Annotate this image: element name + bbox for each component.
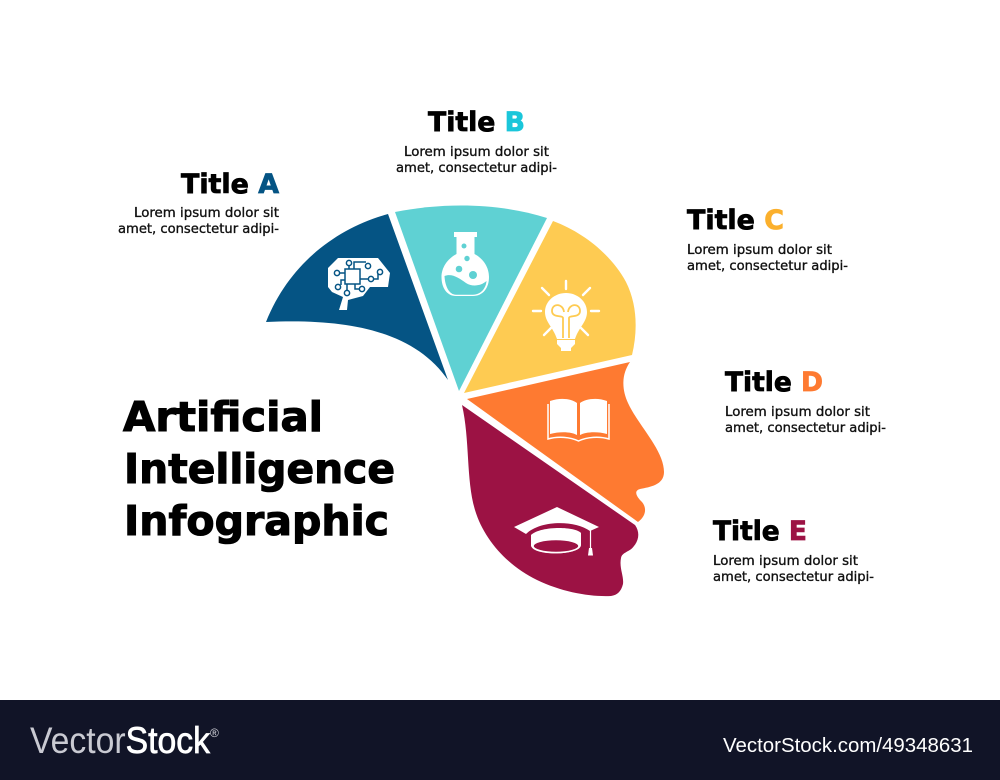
label: Title C: Title C xyxy=(687,205,784,236)
label: Title C: Lorem ipsum dolor sit xyxy=(687,242,832,258)
icon: flask xyxy=(442,232,489,296)
label: Title A: Title A xyxy=(181,169,279,200)
main title: Infographic xyxy=(124,497,389,545)
label: Title D: amet, consectetur adipi- xyxy=(725,420,886,436)
registered mark: ® xyxy=(210,726,219,740)
main title: Artificial xyxy=(123,393,323,441)
label: Title A xyxy=(118,169,279,237)
label: Title E: Lorem ipsum dolor sit xyxy=(713,553,858,569)
icon: light bulb xyxy=(533,281,599,351)
icon: brain circuit xyxy=(328,258,390,310)
segment B: teal xyxy=(395,205,547,391)
segment A: dark blue xyxy=(266,214,448,380)
label: Title D: Title D xyxy=(725,367,823,398)
label: Title D: Lorem ipsum dolor sit xyxy=(725,404,870,420)
segment D: orange xyxy=(467,362,664,522)
main title: Intelligence xyxy=(124,445,395,493)
footer bar xyxy=(0,700,1000,780)
label: Title A: amet, consectetur adipi- xyxy=(118,221,279,237)
main title xyxy=(123,393,395,545)
label: Title E: amet, consectetur adipi- xyxy=(713,569,874,585)
icon: open book xyxy=(548,399,609,441)
label: Title E xyxy=(713,516,874,585)
label: Title E: Title E xyxy=(713,516,807,547)
label: Title C xyxy=(687,205,848,274)
label: Title B xyxy=(396,107,557,176)
footer logo: VectorStock xyxy=(30,720,210,761)
label: Title D xyxy=(725,367,886,436)
label: Title B: Title B xyxy=(428,107,525,138)
footer image id: VectorStock.com/49348631 xyxy=(723,735,973,757)
segment C: yellow xyxy=(464,221,636,393)
label: Title B: Lorem ipsum dolor sit xyxy=(404,144,549,160)
label: Title C: amet, consectetur adipi- xyxy=(687,258,848,274)
segment E: maroon xyxy=(462,405,638,596)
label: Title B: amet, consectetur adipi- xyxy=(396,160,557,176)
icon: graduation cap xyxy=(514,507,599,556)
label: Title A: Lorem ipsum dolor sit xyxy=(134,205,279,221)
